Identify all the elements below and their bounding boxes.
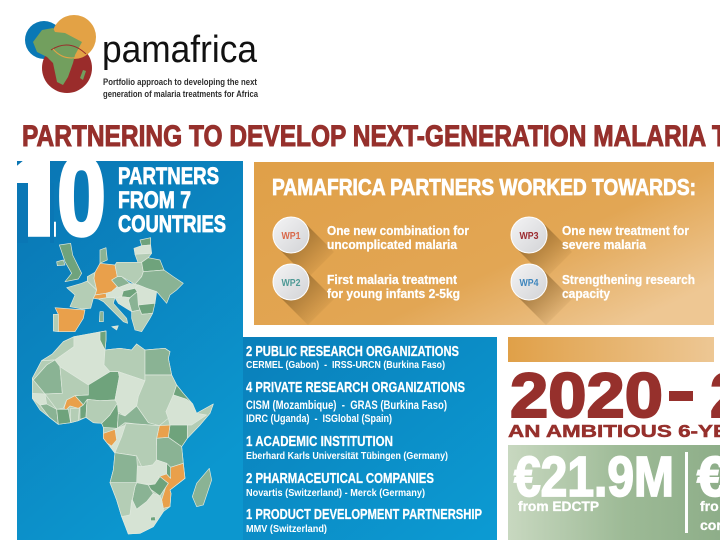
- public research organizations: CERMEL (Gabon) - IRSS-URCN (Burkina Faso): [246, 359, 445, 371]
- WP2 item: First malaria treatment: [327, 272, 458, 287]
- logo wordmark: pamafrica: [102, 29, 258, 71]
- WP1 item: uncomplicated malaria: [327, 237, 458, 252]
- WP3 item: severe malaria: [562, 237, 647, 252]
- partners label: FROM 7: [118, 187, 191, 214]
- EDCTP amount: from EDCTP: [518, 498, 599, 514]
- big number 10: 10: [8, 134, 106, 259]
- orange bar: [508, 337, 714, 362]
- WP1 item: One new combination for: [327, 223, 469, 238]
- WP4 item: Strengthening research: [562, 272, 695, 287]
- academic institution: [246, 434, 448, 462]
- WP2 item: WP2: [282, 278, 301, 289]
- map: Europe: [53, 238, 183, 332]
- product development partnership: [246, 507, 482, 535]
- WP1 item: WP1: [282, 231, 301, 242]
- public research organizations: 2 PUBLIC RESEARCH ORGANIZATIONS: [246, 344, 459, 360]
- pharmaceutical companies: Novartis (Switzerland) - Merck (Germany): [246, 487, 425, 499]
- private research organizations: 4 PRIVATE RESEARCH ORGANIZATIONS: [246, 380, 465, 396]
- panel: funding: [508, 445, 720, 540]
- private research organizations: IDRC (Uganda) - ISGlobal (Spain): [246, 413, 392, 425]
- logo: overlapping circles with Africa: [25, 15, 96, 93]
- academic institution: 1 ACADEMIC INSTITUTION: [246, 434, 393, 450]
- pharmaceutical companies: 2 PHARMACEUTICAL COMPANIES: [246, 471, 434, 487]
- product development partnership: 1 PRODUCT DEVELOPMENT PARTNERSHIP: [246, 507, 482, 523]
- product development partnership: MMV (Switzerland): [246, 523, 327, 535]
- WP4 item: capacity: [562, 286, 611, 301]
- public research organizations: [246, 344, 459, 371]
- panel: partner organizations: [243, 337, 497, 540]
- big number 10: [17, 161, 104, 238]
- academic institution: Eberhard Karls Universität Tübingen (Germany): [246, 450, 448, 462]
- logo tagline: [103, 77, 259, 99]
- WP3 item: One new treatment for: [562, 223, 689, 238]
- WP4 item: [511, 264, 695, 325]
- logo tagline: generation of malaria treatments for Africa: [103, 89, 259, 99]
- EDCTP amount: €21.9M: [514, 445, 674, 509]
- years heading: 2020: [510, 361, 663, 431]
- second amount: fro: [700, 498, 719, 514]
- WP2 item: [273, 264, 460, 325]
- years heading: [510, 361, 720, 431]
- map: Africa: [32, 331, 213, 534]
- partners label: [118, 163, 226, 238]
- partners label: COUNTRIES: [118, 211, 226, 238]
- WP3 item: WP3: [520, 231, 539, 242]
- WP1 item: [273, 217, 469, 278]
- private research organizations: CISM (Mozambique) - GRAS (Burkina Faso): [246, 400, 447, 412]
- pharmaceutical companies: [246, 471, 434, 499]
- private research organizations: [246, 380, 465, 425]
- WP3 item: [511, 217, 689, 278]
- logo tagline: Portfolio approach to developing the next: [103, 77, 257, 87]
- panel: partners and map: [17, 161, 243, 540]
- subheading: AN AMBITIOUS 6-YE: [508, 421, 720, 441]
- partners label: PARTNERS: [118, 163, 219, 190]
- panel: partners worked towards: [254, 162, 714, 325]
- WP2 item: for young infants 2-5kg: [327, 286, 460, 301]
- WP4 item: WP4: [520, 278, 539, 289]
